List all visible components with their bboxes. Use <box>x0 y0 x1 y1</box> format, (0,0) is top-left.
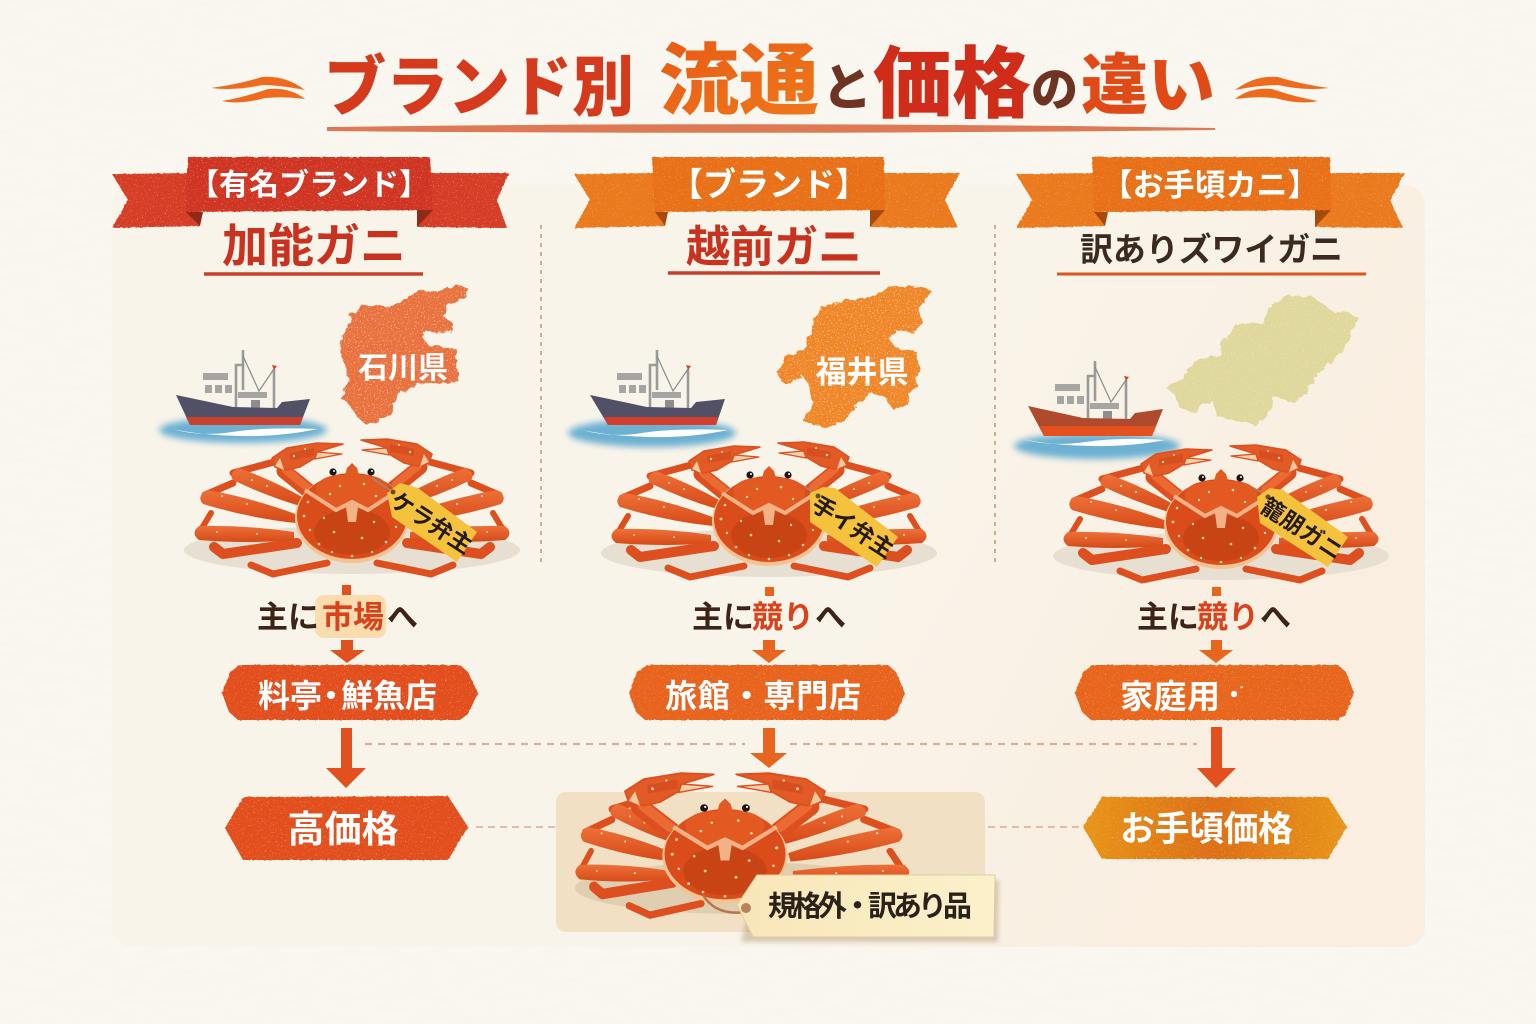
brand name: 訳ありズワイガニ <box>1080 231 1343 268</box>
tag: crab label: 籠朋ガニ <box>1256 493 1348 565</box>
map: 福井県: 福井県 <box>816 355 908 390</box>
title text <box>324 37 1215 128</box>
arrow to outlet <box>1199 640 1233 663</box>
flow: auction label: へ <box>815 600 846 635</box>
title text: 流通 <box>659 37 819 125</box>
divider right <box>994 225 996 562</box>
title text: ブランド別 <box>324 50 634 124</box>
arrow stub <box>342 585 351 595</box>
map: 福井県 <box>777 285 932 427</box>
ribbon: 有名ブランド <box>112 157 509 228</box>
connector: dashed line upper left <box>365 743 745 745</box>
outlet label <box>629 665 905 720</box>
arrow stub <box>765 587 774 596</box>
brand underline <box>668 271 880 275</box>
column 3: 訳ありズワイガニ <box>1014 157 1405 859</box>
flow: auction label: 主に <box>692 600 754 635</box>
title decoration: left swoosh <box>211 77 305 102</box>
outlet label <box>222 665 478 720</box>
price label <box>1083 797 1347 859</box>
price label: 高価格 <box>288 809 398 850</box>
center tray <box>556 792 985 932</box>
column 1: 加能ガニ <box>112 157 520 860</box>
title text: 価格 <box>873 40 1031 128</box>
flow: market label <box>257 595 418 638</box>
crab with tag <box>184 439 520 574</box>
brand underline <box>1057 272 1366 276</box>
crab with tag <box>601 442 937 577</box>
connector: dashed line lower right <box>976 826 1083 828</box>
outlet label: ゛ <box>1240 686 1250 698</box>
tag: irregular goods: 規格外・訳あり品 <box>768 890 972 923</box>
flow: auction label: 競り <box>1197 600 1259 635</box>
map: 石川県 <box>340 285 468 425</box>
title <box>211 37 1329 132</box>
title text: と <box>822 60 872 116</box>
outlet label: ・ <box>1222 682 1246 709</box>
ribbon: お手頃カニ <box>1016 157 1405 228</box>
ribbon: ブランド <box>574 157 960 228</box>
ribbon: ブランド: 【ブランド】 <box>670 166 868 203</box>
arrow to center <box>750 728 787 768</box>
tag: crab label: 手イ弁主 <box>807 491 899 563</box>
arrow stub <box>1212 587 1221 596</box>
outlet label: 家庭用 <box>1120 678 1220 715</box>
brand name: 加能ガニ <box>222 220 406 272</box>
tag: crab label: ケラ弁主 <box>386 487 477 559</box>
title text: 違い <box>1081 48 1215 122</box>
connector: dashed line lower left <box>476 826 565 828</box>
brand underline <box>204 272 423 276</box>
outlet label: 旅館・専門店 <box>665 678 861 714</box>
ribbon: お手頃カニ: 【お手頃カニ】 <box>1102 168 1318 203</box>
panel: irregular crab <box>556 773 999 942</box>
arrow to price <box>1197 727 1236 788</box>
arrow to outlet <box>330 640 365 663</box>
price label <box>225 796 468 860</box>
brand name: 越前ガニ <box>686 223 862 272</box>
arrow to outlet <box>752 640 786 663</box>
ribbon: 有名ブランド: 【有名ブランド】 <box>189 168 429 202</box>
outlet label <box>1075 665 1354 720</box>
flow: market label: へ <box>387 600 418 635</box>
flow: market label: 主に <box>257 600 319 635</box>
crab with tag <box>1053 445 1389 580</box>
map: 石川県: 石川県 <box>358 352 448 385</box>
boat with waves <box>159 350 327 443</box>
arrow to price <box>326 728 366 788</box>
boat with waves <box>568 350 736 447</box>
boat with waves <box>1014 361 1180 459</box>
tag: irregular goods <box>703 875 999 942</box>
flow: auction label: 主に <box>1137 600 1199 635</box>
panel: comparison background <box>112 185 1425 947</box>
outlet label: 鮮魚店 <box>341 678 437 714</box>
price label: お手頃価格 <box>1120 810 1293 849</box>
map: pale region <box>1167 295 1360 425</box>
flow: market label: 市場 <box>322 600 384 635</box>
connector: dashed line upper right <box>790 743 1197 745</box>
outlet label: ・ <box>315 678 347 714</box>
outlet label: 料亭 <box>258 678 322 714</box>
center crab <box>575 773 909 915</box>
divider left <box>540 225 542 565</box>
title underline <box>328 125 1215 132</box>
title text: の <box>1031 63 1078 116</box>
flow: auction label: へ <box>1260 600 1291 635</box>
column 2: 越前ガニ <box>568 157 960 768</box>
flow: auction label: 競り <box>752 600 814 635</box>
title decoration: right swoosh <box>1235 77 1329 102</box>
